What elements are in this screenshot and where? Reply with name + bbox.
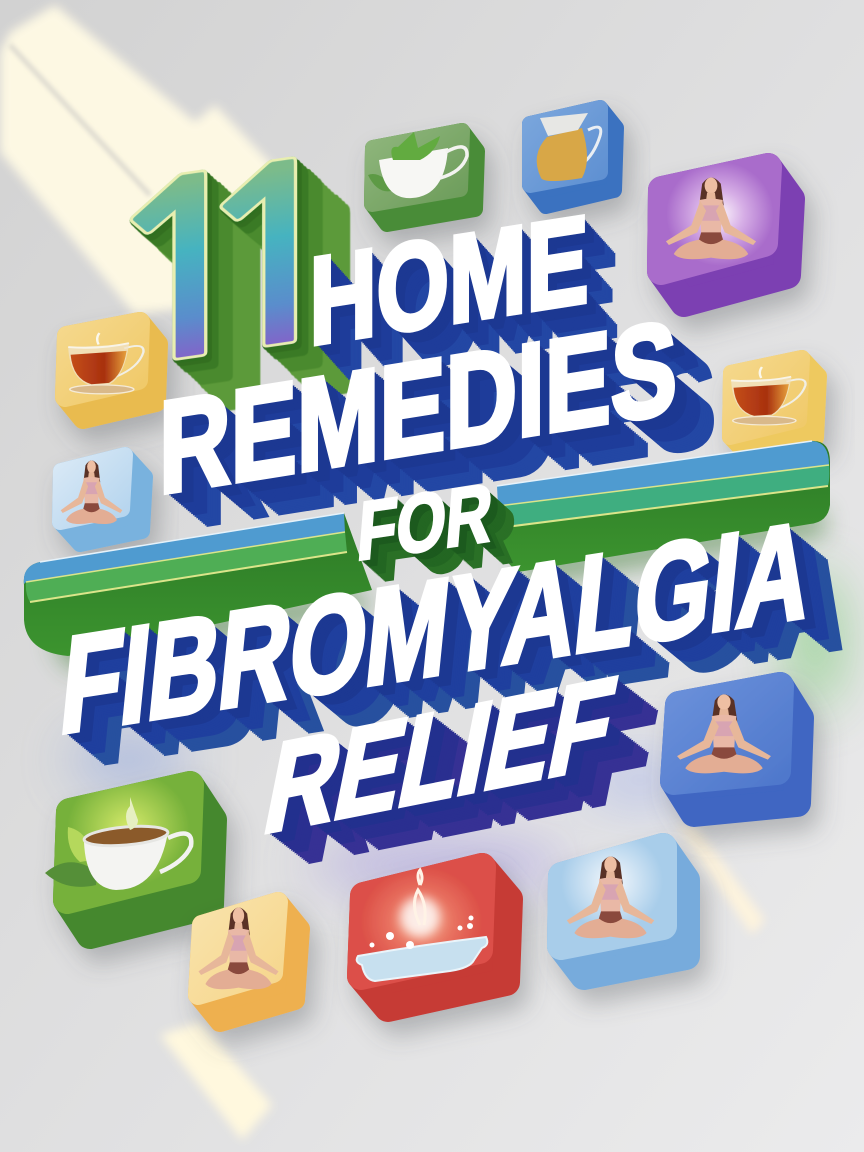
title number: 11: [93, 131, 339, 409]
icon: green tea bottom tile: [45, 785, 213, 935]
icon: honey jar tile: [530, 108, 616, 206]
icon: red bath tile: [357, 867, 509, 1008]
icon: blue yoga right tile: [674, 686, 800, 813]
icon: yellow yoga bottom tile: [198, 902, 300, 1022]
icon: amber tea left tile: [65, 322, 158, 419]
title number: 11: 11: [93, 141, 273, 408]
title line: REMEDIES: REMEDIES: [159, 292, 677, 522]
ribbon soft shadows: [50, 510, 825, 670]
title line: FIBROMYALGIA: FIBROMYALGIA: [55, 493, 817, 763]
icon: amber tea right tile: [730, 358, 819, 455]
title line: FOR: FOR: [354, 466, 496, 578]
title line: HOME: HOME: [310, 190, 588, 372]
right ribbon band: [497, 441, 830, 572]
icon: purple yoga tile: [661, 167, 791, 303]
title line: RELIEF: RELIEF: [255, 650, 626, 861]
icon: green tea cup tile: [368, 131, 477, 224]
colored glow behind title: [70, 570, 845, 890]
icon: light blue yoga bottom tile: [561, 847, 686, 976]
icon: light blue yoga left tile: [60, 455, 145, 544]
left ribbon band: [24, 513, 372, 656]
